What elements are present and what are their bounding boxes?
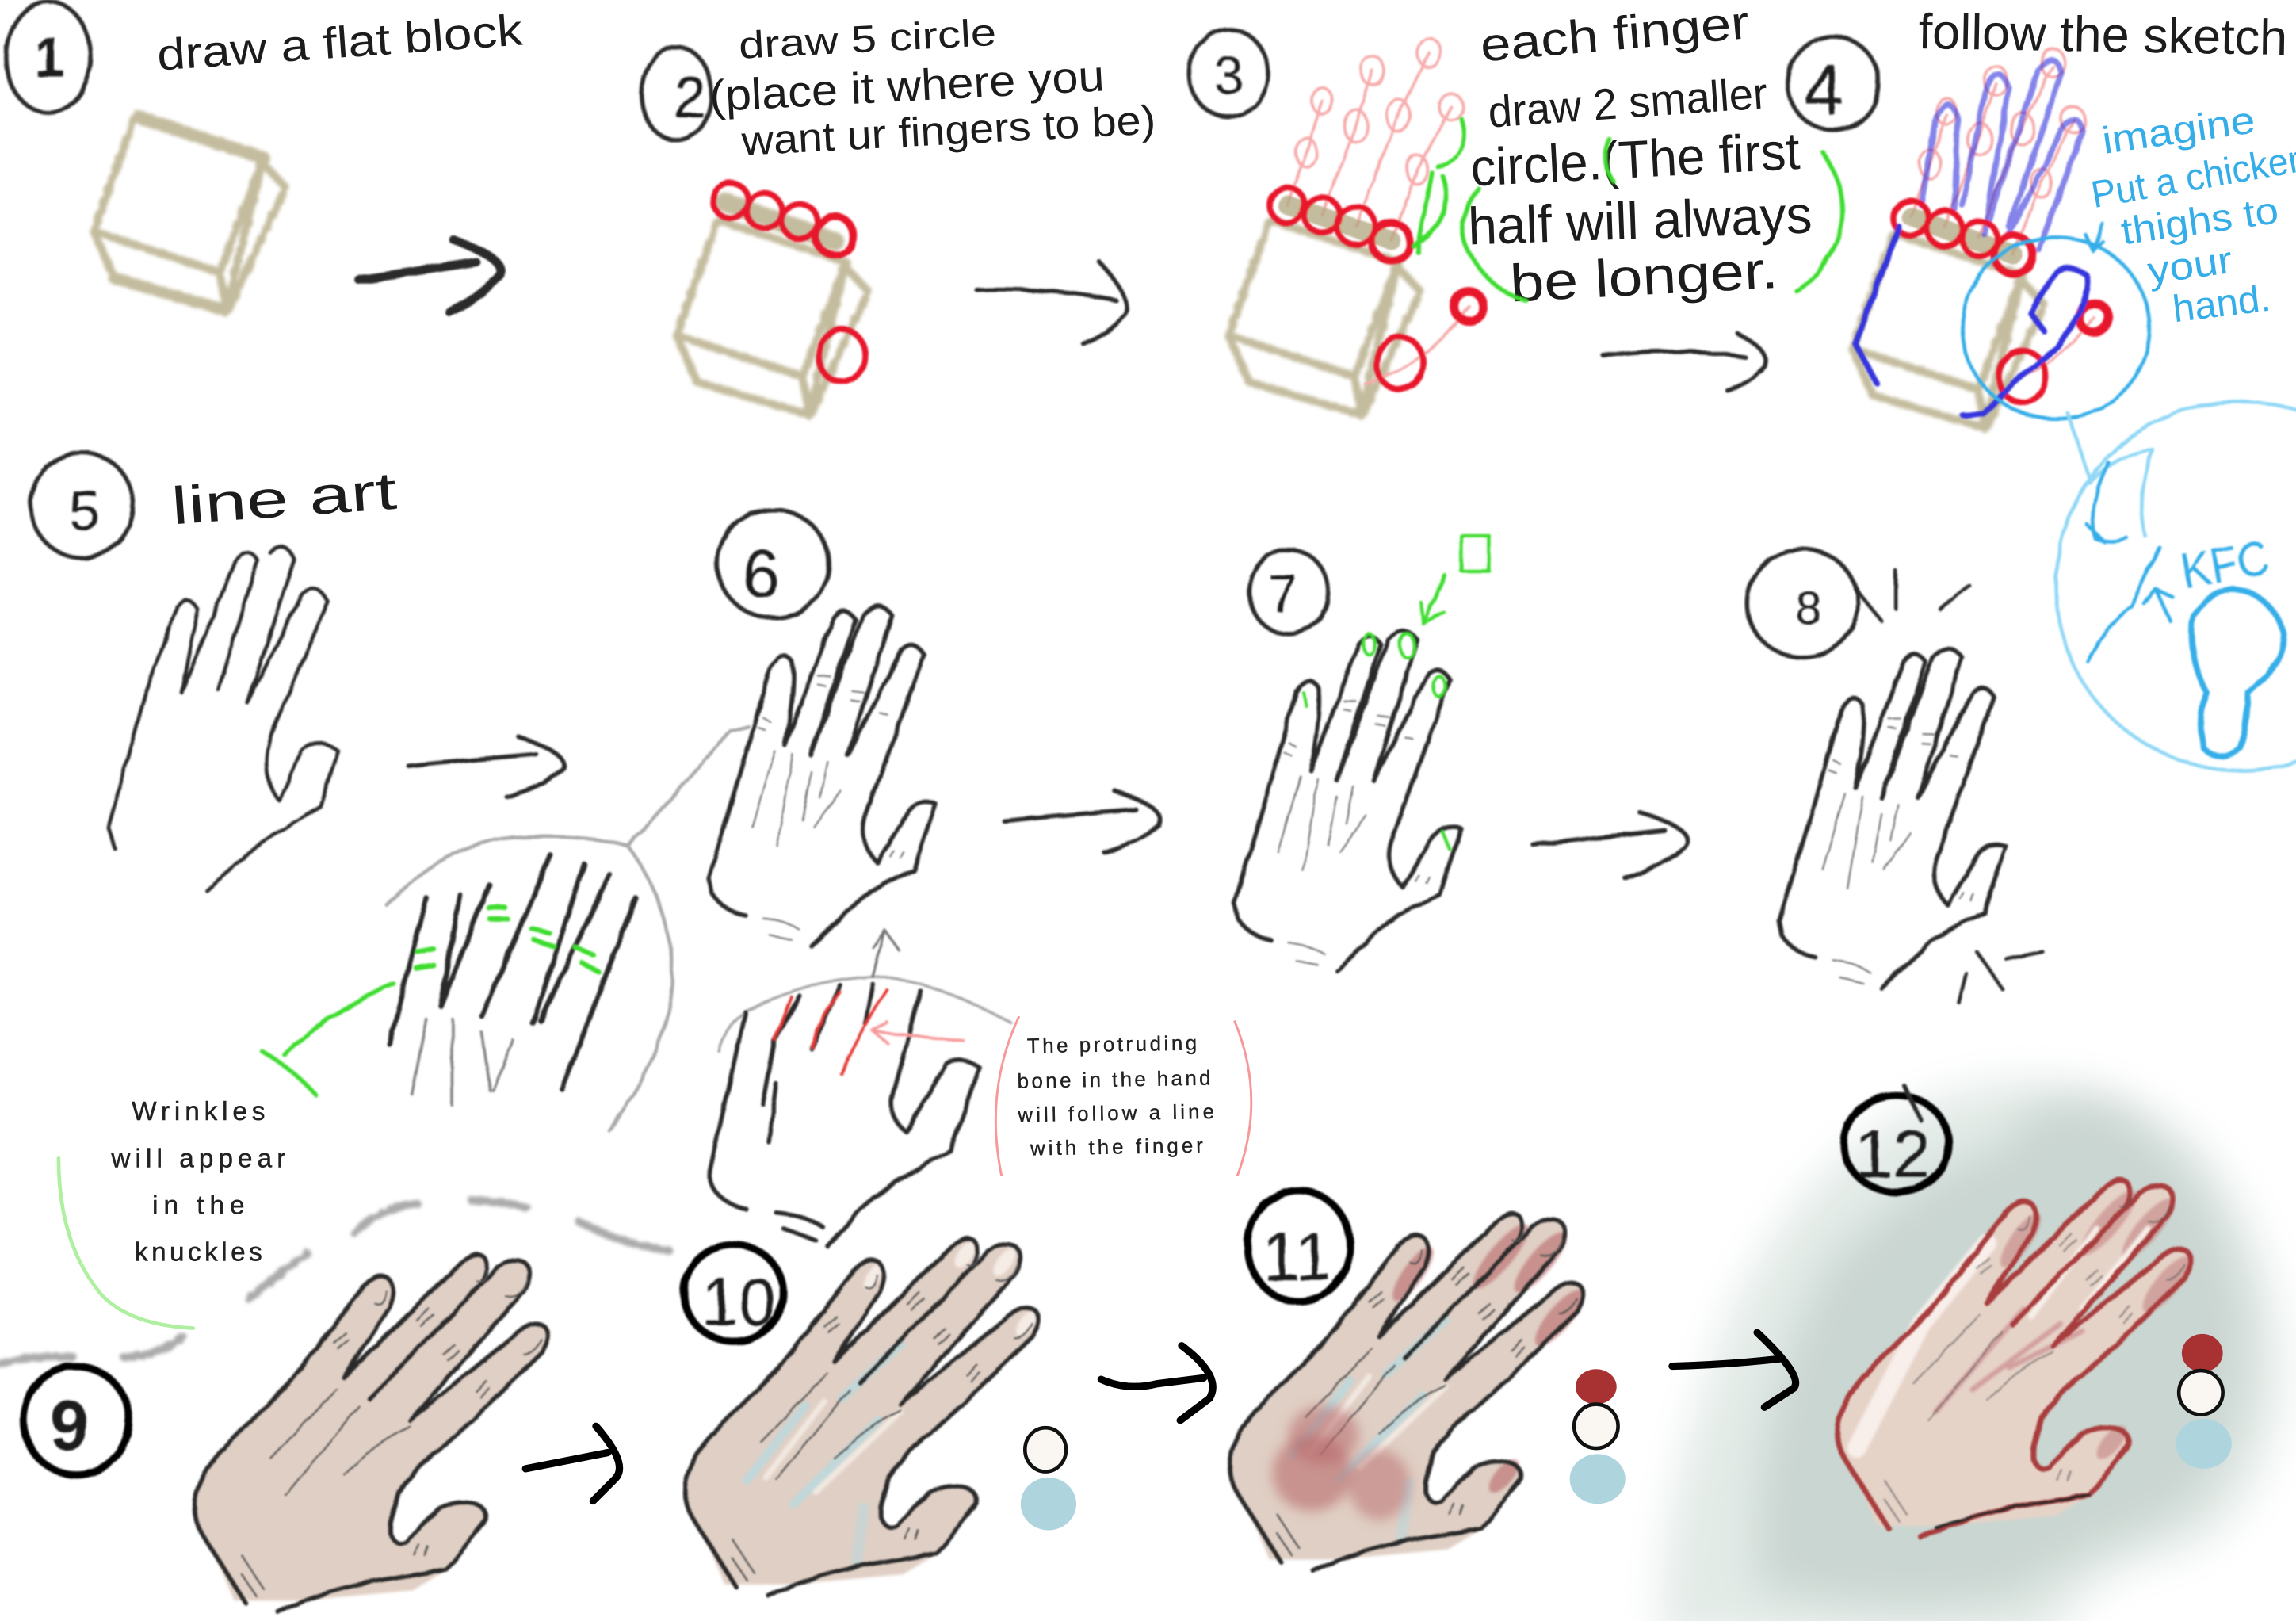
number badge 5: 5 [69,480,100,542]
step 8: finished line art [1747,549,2042,1003]
red blush blobs [1273,1405,1410,1520]
blue annotation text: imagine [2099,99,2258,162]
step 6: knuckles and wrinkles [0,510,1251,1363]
green nail example and arrow [1422,536,1489,624]
note: wrinkles will appear in the knuckles: Wrinkles [132,1097,265,1126]
palette swatches 12 [2176,1334,2232,1469]
step 2: draw five circles [641,12,1156,416]
step 4: follow the sketch [1788,4,2296,770]
number badge 10 [684,1244,783,1341]
blue circle and pointer arrow [1962,224,2149,419]
arrow 2 to 3 [976,261,1127,344]
number badge 12 [1843,1085,1949,1192]
palette swatches 11 [1570,1369,1626,1504]
arrow 6 to 7 [1004,791,1161,852]
blue annotation text: your [2145,239,2235,292]
number badge 7 [1249,549,1328,634]
note: wrinkles will appear in the knuckles: will appear [110,1144,285,1173]
green curve to note [59,1158,193,1329]
hand with red blush [1230,1213,1591,1571]
number badge 8: 8 [1795,581,1821,634]
instruction text step 2: draw 5 circle [738,12,997,67]
instruction text step 3: draw 2 smaller [1486,68,1769,137]
note: wrinkles will appear in the knuckles [110,1097,285,1267]
step 12: final render [1660,1080,2284,1621]
number badge 6 [717,510,829,618]
number badge 6: 6 [743,537,780,613]
note: protruding bone: bone in the hand [1017,1068,1211,1093]
blue annotation text: hand. [2171,277,2273,331]
number badge 8 [1747,549,1859,657]
hand skin base [194,1254,548,1612]
heading: draw a flat block: draw a flat block [155,6,524,80]
instruction text step 2: want ur fingers to be) [739,97,1156,164]
number badge 9 [24,1367,129,1474]
instruction text step 3 [1467,0,1813,314]
instruction text step 2: (place it where you [708,51,1106,120]
note: protruding bone: The protruding [1027,1032,1197,1057]
heading: follow the sketch: follow the sketch [1918,4,2288,66]
step 3: finger circles [1189,0,1843,416]
number badge 11 [1247,1191,1350,1302]
number badge 9: 9 [50,1386,89,1465]
KFC label: KFC [2177,530,2273,599]
step 7: fingernails [1235,536,1688,971]
green length brackets [1413,119,1843,300]
blue annotation text [2088,99,2296,331]
finished hand [1779,648,2006,988]
hand drawing with knuckle wrinkles [709,606,936,946]
block with finger skeleton [1228,38,1484,416]
instruction text step 2 [708,12,1156,164]
green pointer to knuckles [262,984,394,1095]
number badge 1 [6,2,91,113]
hand with green nails [1235,631,1461,971]
number badge 3 [1189,29,1268,117]
instruction text step 3: half will always [1467,185,1813,256]
KFC drumstick inset [2056,401,2296,770]
instruction text step 3: circle.(The first [1469,122,1801,198]
blue annotation text: thighs to [2118,189,2281,253]
note: wrinkles will appear in the knuckles: knuckles [135,1238,262,1267]
note: protruding bone: with the finger [1030,1135,1204,1160]
emphasis ticks [1855,571,2042,1003]
arrow 11 to 12 [1672,1332,1796,1407]
step 1: flat block [6,2,524,312]
arrow 10 to 11 [1101,1346,1213,1420]
note: protruding bone: will follow a line [1017,1101,1214,1126]
note: wrinkles will appear in the knuckles: in the [152,1191,245,1220]
number badge 2 [641,47,712,140]
finished painted hand [1837,1179,2199,1538]
arrow 9 to 10 [525,1426,620,1501]
green-gray background wash [1660,1080,2284,1621]
note: protruding bone [1016,1032,1215,1160]
number badge 11: 11 [1263,1220,1332,1295]
block with circles [677,183,869,416]
number badge 1: 1 [33,25,65,88]
bone inset hand [709,930,1012,1246]
instruction text step 3: be longer. [1509,241,1779,314]
number badge 5 [31,453,133,558]
number badge 4: 4 [1804,51,1843,129]
gray dashed circle around hand 9 [0,1201,669,1363]
arrow 5 to 6 [408,736,563,797]
pink brackets around note [995,1016,1251,1176]
number badge 12: 12 [1855,1117,1930,1192]
zoom inset of knuckles [387,726,748,1130]
heading: line art: line art [170,462,399,536]
palette swatches 10 [1021,1428,1076,1530]
arrow 1 to 2 [359,240,501,312]
instruction text step 3: each finger [1478,0,1752,72]
step 5: line art [31,453,563,890]
hand with blue shading [685,1238,1041,1596]
sketch block [94,117,285,312]
number badge 3: 3 [1214,47,1244,105]
number badge 10: 10 [701,1265,777,1340]
arrow 7 to 8 [1533,812,1688,878]
number badge 2: 2 [674,64,706,130]
block with blue hand outline [1852,48,2109,429]
step 11: red shading [1230,1191,1626,1571]
step 10: cool shading [684,1238,1213,1596]
arrow 3 to 4 [1603,334,1766,391]
number badge 4 [1788,36,1878,130]
number badge 7: 7 [1268,565,1297,624]
step 9: base skin colour [24,1254,620,1612]
hand outline [109,546,338,890]
